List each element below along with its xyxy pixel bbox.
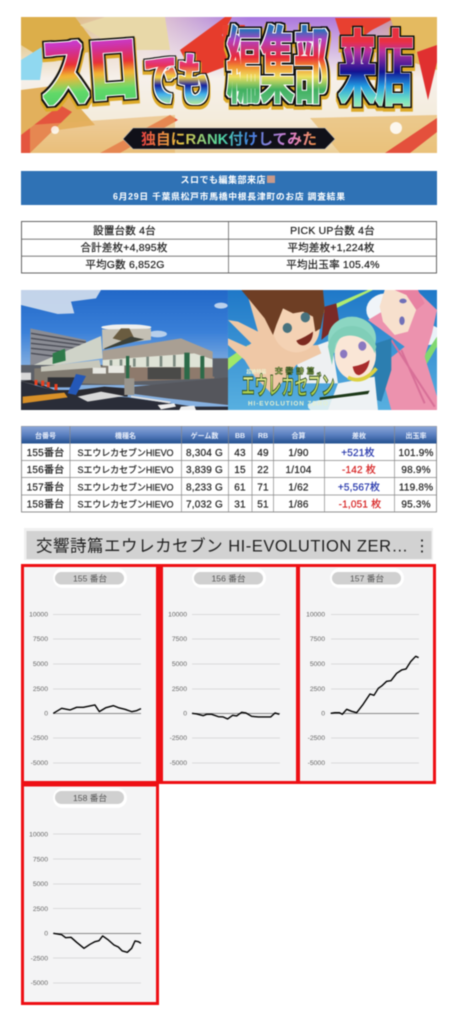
summary table: 平均出玉率 105.4% [286,258,380,271]
data table: 119.8% [399,482,433,494]
panel: machine 156 chart: 0 [183,710,187,718]
photo: anime key visual [228,290,441,415]
panel: machine 157 chart: 7500 [310,636,325,643]
panel: machine 156 chart: 7500 [172,636,187,643]
line: 156 balance [192,712,279,719]
logo: エウレカセブン: エウレカセブン [241,372,335,401]
panel: machine 158 chart: 0 [44,930,48,938]
banner: スロでも編集部来店 [21,17,437,153]
data table: SエウレカセブンHIEVO [78,482,174,492]
label pill: 157 番台: 157 番台 [350,572,384,584]
data table: 7,032 G [186,500,223,510]
line: 158 balance [53,933,141,952]
panel: machine 158 chart: 2500 [33,906,48,913]
summary table: 平均差枚+1,224枚 [287,241,375,254]
data table: 1/104 [285,465,312,476]
panel: machine 158 chart: -5000 [31,980,48,987]
panel: machine 157 chart: 2500 [310,686,325,693]
label pill: 155 番台 [53,568,127,588]
panel: machine 155 chart: 0 [44,710,48,718]
summary table: 設置台数 4台 [93,224,156,237]
data table: 1/86 [288,500,309,510]
data table: 1/90 [288,448,309,459]
data table: 98.9% [401,465,431,476]
data table: 1/62 [288,482,309,494]
panel: machine 157 chart [298,566,434,782]
data table: -1,051 枚 [339,498,381,510]
line: 157 balance [331,656,419,714]
banner title: スロ: スロ [37,24,141,118]
panel: machine 157 chart: -5000 [308,760,325,767]
panel: machine 155 chart [22,566,158,782]
data table: -142 枚 [342,463,376,476]
panel: machine 157 chart: -2500 [308,735,325,742]
data table: 15 [234,465,246,476]
data table: 49 [257,448,269,459]
data table: 8,304 G [186,448,223,459]
label pill: 156 番台 [192,568,266,588]
panel: machine 156 chart: 10000 [168,612,187,618]
table header row: 台番号 [35,431,56,440]
summary table: PICK UP台数 4台 [290,224,375,237]
label pill: 155 番台: 155 番台 [73,572,107,584]
data table: 158番台 [27,498,64,510]
panel: machine 155 chart: -2500 [31,735,48,742]
banner ribbon [123,128,335,149]
panel: machine 155 chart: -5000 [31,760,48,767]
data table: SエウレカセブンHIEVO [78,447,174,458]
panel: machine 158 chart [22,785,158,1004]
panel: machine 158 chart: 7500 [33,856,48,864]
summary table [21,221,437,273]
character: boy with raised hand [228,290,340,393]
summary table: 合計差枚+4,895枚 [80,241,168,254]
panel: machine 155 chart: 7500 [33,636,48,643]
character: aqua-haired girl [328,317,391,410]
logo: エウレカセブン: HI-EVOLUTION ZERO [248,400,328,407]
logo: エウレカセブン: 交響詩篇 [275,365,315,375]
panel: machine 157 chart: 10000 [306,612,325,618]
panel: machine 155 chart: 5000 [33,661,48,668]
data table: 157番台 [27,480,64,494]
data table: 156番台 [27,463,64,476]
table header row: BB [235,433,245,440]
panel: machine 156 chart: -2500 [170,735,187,742]
table header row: 機種名 [115,431,136,440]
photo: store exterior [21,290,228,410]
table header row: 差枚 [352,431,366,440]
data table: SエウレカセブンHIEVO [78,464,174,475]
panel: machine 156 chart: 5000 [172,661,187,668]
data table: 71 [257,482,269,494]
data table: SエウレカセブンHIEVO [78,498,174,510]
data table: 43 [234,448,246,459]
panel: machine 158 chart: 10000 [29,832,48,838]
table header row: 出玉率 [406,431,426,440]
table header row: 合算 [292,431,306,440]
panel: machine 156 chart: 2500 [172,686,187,693]
panel: machine 158 chart: 5000 [33,881,48,888]
data table: 51 [257,500,269,510]
label pill: 157 番台 [330,568,404,588]
data table [21,426,437,512]
banner ribbon: 独自にRANK付けしてみた [141,130,317,148]
panel: machine 156 chart: -5000 [170,760,187,767]
panel: machine 155 chart: 2500 [33,686,48,693]
data table: 22 [257,465,269,476]
panel: machine 158 chart: -2500 [31,956,48,962]
panel: machine 155 chart: 10000 [29,612,48,618]
data table: 101.9% [398,448,434,459]
data table: 3,839 G [186,465,223,476]
panel: machine 157 chart: 0 [321,710,325,718]
summary table: 平均G数 6,852G [85,258,165,271]
logo: エウレカセブン [241,365,370,407]
label pill: 158 番台 [53,788,127,808]
chart section title bar: ⋮ [414,538,430,555]
blue heading box [21,171,437,205]
label pill: 158 番台: 158 番台 [73,792,107,803]
data table: 155番台 [27,446,64,459]
logo: エウレカセブン: 超絶特装 [246,368,266,375]
table header row [22,426,436,444]
banner title: でも: でも [144,49,210,112]
data table: +521枚 [341,446,375,459]
data table: 61 [234,482,246,494]
label pill: 156 番台: 156 番台 [212,572,246,584]
line: 155 balance [53,705,141,713]
chart section title bar [24,528,433,560]
data table: +5,567枚 [338,480,380,494]
chart section title bar: 交響詩篇エウレカセブン HI-EVOLUTION ZER… [36,536,408,556]
table header row: RB [258,433,268,440]
data table: 95.3% [401,500,431,510]
data table: 8,233 G [186,482,223,494]
panel: machine 157 chart: 5000 [310,661,325,668]
table header row: ゲーム数 [191,431,218,440]
character: pink-haired girl [368,290,437,410]
panel: machine 156 chart [159,564,300,784]
blue heading box: 6月29日 千葉県松戸市馬橋中根長津町のお店 調査結果 [113,190,345,202]
data table: 31 [234,500,246,510]
blue heading box: スロでも編集部来店 [180,174,266,185]
